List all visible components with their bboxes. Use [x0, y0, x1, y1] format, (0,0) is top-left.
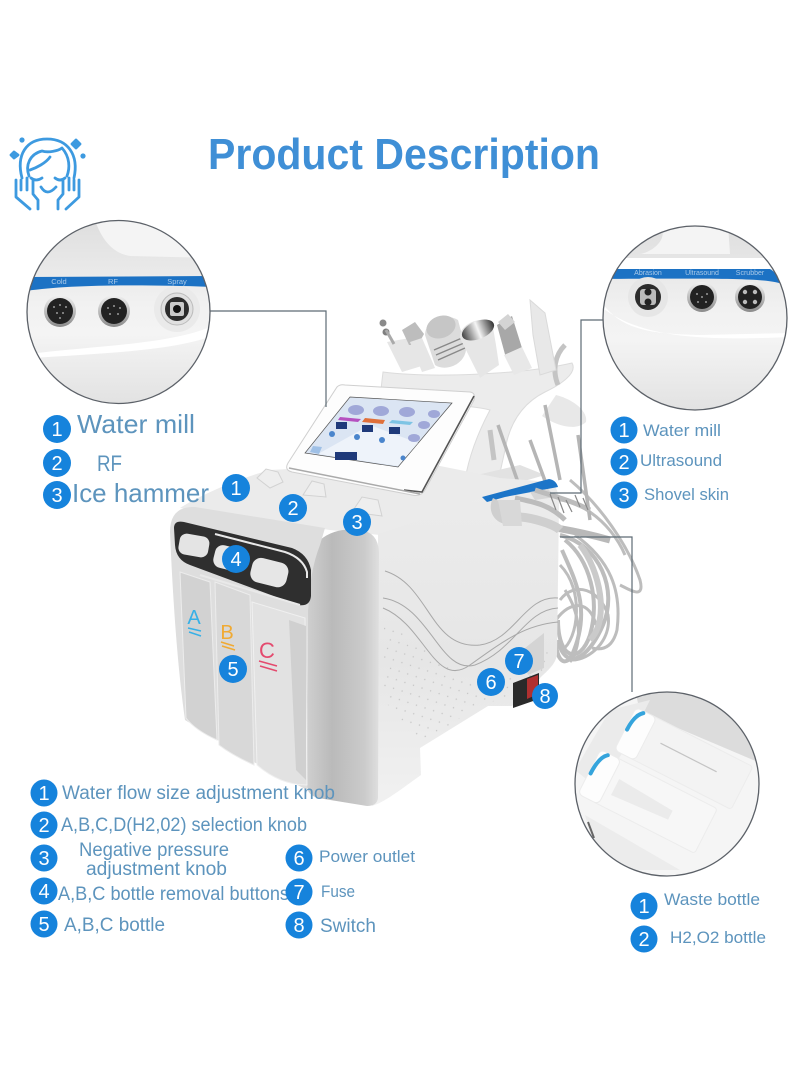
badge 3 [43, 481, 71, 509]
badge 8 [286, 912, 312, 938]
badge 3: 3 [618, 485, 630, 507]
waste bottle [614, 707, 753, 809]
text: H2,O2 bottle: H2,O2 bottle [670, 928, 766, 947]
badge machine 3 [343, 508, 371, 536]
badge machine 5 [219, 655, 247, 683]
probe holder rack [380, 345, 590, 520]
port label RF: RF [108, 277, 118, 286]
text: switch: Switch [320, 916, 376, 937]
port label Ultrasound: Ultrasound [685, 270, 719, 277]
badge machine 5: 5 [227, 659, 239, 681]
badge machine 1: 1 [230, 478, 242, 500]
port label Scrubber: Scrubber [736, 270, 765, 277]
panel: bottles close-up [575, 690, 765, 876]
badge 1: 1 [618, 420, 630, 442]
text: Ice hammer: Ice hammer [72, 478, 209, 508]
badge machine 2 [279, 494, 307, 522]
product machine photo illustration [170, 300, 641, 806]
badge 7 [286, 878, 312, 906]
badge 4 [30, 878, 58, 904]
speaker dots [384, 620, 548, 744]
badge 1: 1 [51, 419, 63, 441]
bottles A B C [180, 572, 307, 785]
badge machine 4 [222, 545, 250, 573]
port: cold [44, 295, 76, 327]
side connector strip [482, 479, 590, 530]
badge 3: 3 [38, 848, 50, 870]
power switch [513, 673, 539, 708]
badge machine 6: 6 [485, 672, 497, 694]
badge 2 [30, 812, 58, 838]
rating label [520, 633, 544, 675]
panel: right connector close-up [600, 225, 790, 410]
badge machine 7 [505, 647, 533, 675]
panel: left connector close-up [20, 210, 215, 404]
badge machine 6 [477, 668, 505, 696]
bottle label C: C [259, 638, 275, 663]
side body [372, 482, 559, 806]
badge machine 3: 3 [351, 512, 363, 534]
text: Water mill: Water mill [77, 409, 195, 439]
front panel [170, 507, 325, 790]
port: RF [98, 295, 130, 327]
text: negative pressure knob [79, 840, 229, 880]
icon: face with hands and sparkles [11, 139, 84, 209]
bottle label B: B [220, 622, 234, 644]
text: removal buttons: A,B,C bottle removal buttons [58, 884, 289, 905]
bottle removal button panel [174, 522, 311, 605]
port: abrasion [628, 277, 668, 317]
port: ultrasound [687, 282, 717, 312]
knobs [257, 469, 382, 516]
labels: front panel list [30, 780, 415, 938]
cable bundle [500, 480, 641, 662]
leader line: left circle [210, 311, 326, 407]
badge 8: 8 [293, 915, 305, 937]
badge machine 4: 4 [230, 549, 242, 571]
port: scrubber [735, 282, 765, 312]
port: spray [156, 292, 199, 332]
bottle label A: A [187, 607, 201, 629]
text: negative pressure knob: adjustment knob [86, 859, 227, 880]
badge 1: 1 [638, 896, 650, 918]
badge machine 2: 2 [287, 498, 299, 520]
text: water flow knob: Water flow size adjustment knob [62, 783, 335, 804]
front grey band [307, 529, 379, 806]
port label Abrasion: Abrasion [634, 270, 662, 277]
badge 1 [43, 415, 71, 443]
badge 1 [30, 780, 58, 806]
badge 5: 5 [38, 914, 50, 936]
badge 2: 2 [618, 452, 630, 474]
text: negative pressure knob: Negative pressure [79, 840, 229, 861]
leader line: bottom circle [560, 537, 632, 692]
leader line: right circle [550, 320, 603, 493]
badge 6 [286, 844, 312, 872]
port label Spray: Spray [167, 277, 187, 286]
decorative waves [383, 571, 558, 671]
badge machine 8 [532, 683, 558, 709]
text: waste bottle: Waste bottle [664, 890, 760, 909]
badge machine 1 [222, 474, 250, 502]
badge machine 8: 8 [539, 686, 551, 708]
badge 7: 7 [293, 882, 305, 904]
port label Cold: Cold [51, 277, 67, 286]
badge 2: 2 [638, 929, 650, 951]
text: Shovel skin: Shovel skin [644, 485, 729, 504]
badge 4: 4 [38, 881, 50, 903]
text: Ultrasound: Ultrasound [640, 451, 722, 470]
text: power outlet: Power outlet [319, 847, 415, 866]
text: fuse: Fuse [321, 882, 355, 901]
badge machine 7: 7 [513, 651, 525, 673]
labels: right connector list [610, 416, 729, 508]
text: bottle: A,B,C bottle [64, 915, 165, 936]
badge 5 [30, 910, 58, 938]
badge 2: 2 [38, 815, 50, 837]
touch screen [287, 385, 474, 495]
labels: bottle list [630, 890, 766, 952]
badge 1: 1 [38, 783, 50, 805]
top surface [180, 462, 560, 535]
badge 2 [43, 449, 71, 477]
badge 6: 6 [293, 848, 305, 870]
badges on machine [219, 474, 558, 709]
text: selection knob: A,B,C,D(H2,02) selection knob [61, 815, 307, 836]
badge 3: 3 [51, 485, 63, 507]
H2, O2 bottle [578, 749, 717, 853]
text: Water mill: Water mill [643, 421, 721, 440]
badge 3 [30, 844, 58, 872]
text: RF: RF [97, 451, 122, 476]
title: Product Description [208, 130, 600, 179]
badge 2: 2 [51, 453, 63, 475]
labels: left connector list [43, 409, 209, 509]
probes [380, 300, 556, 378]
